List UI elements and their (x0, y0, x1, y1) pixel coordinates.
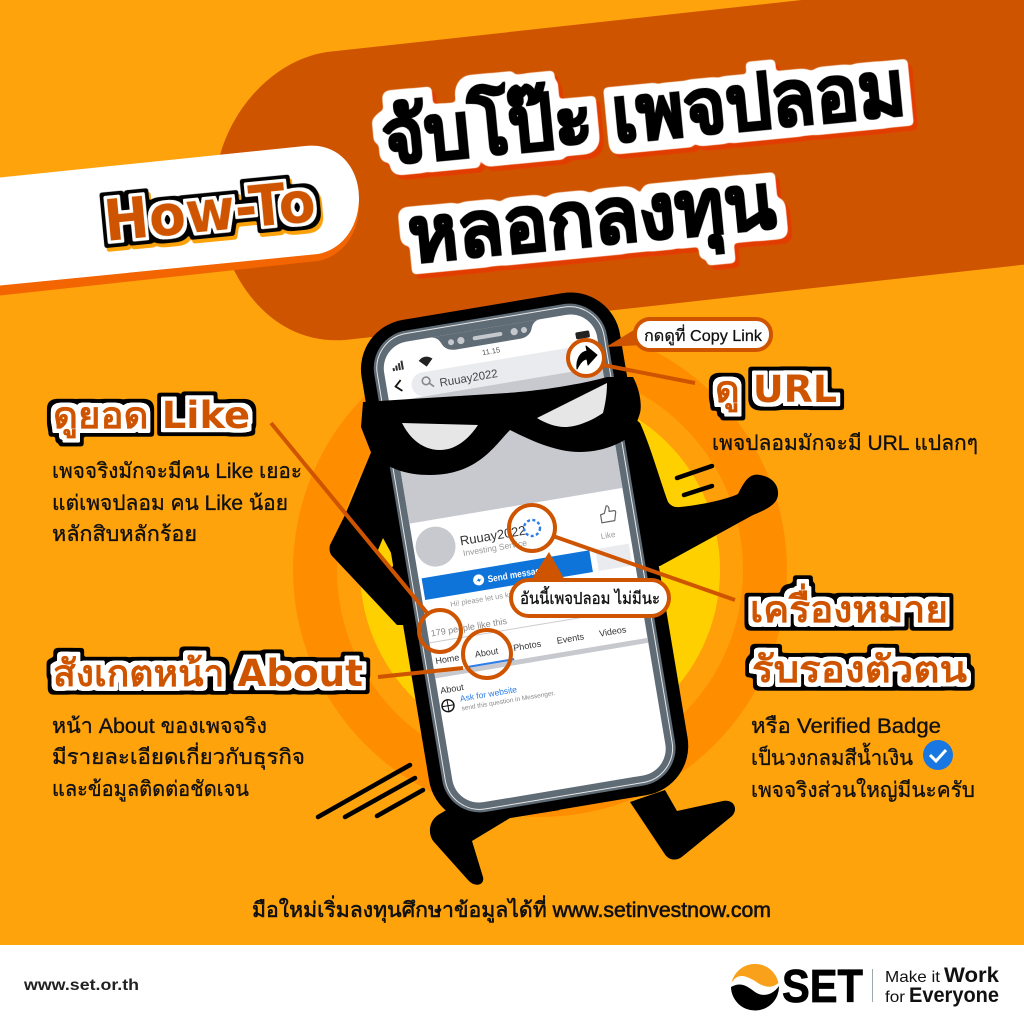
pointer lines (271, 365, 735, 677)
search field: Ruuay2022 (439, 368, 499, 390)
about section (439, 667, 556, 716)
callout: copy link: กดดูที่ Copy Link (644, 324, 763, 346)
SET logo: Work (944, 964, 999, 987)
section: view likes: หลักสิบหลักร้อย (52, 523, 197, 546)
tabs: Photos (513, 638, 542, 653)
section: about page (52, 652, 363, 802)
SET logo: for (885, 989, 906, 1006)
mask eyes (402, 383, 607, 450)
callout: no badge on fake page: อันนี้เพจปลอม ไม่มีนะ (520, 586, 660, 608)
footer note: มือใหม่เริ่มลงทุนศึกษาข้อมูลได้ที่ www.setinvestnow.com (252, 895, 771, 923)
title text: หลอกลงทุน (404, 159, 779, 284)
smartphone (353, 285, 696, 830)
section: view url (712, 368, 978, 455)
section: about page: หน้า About ของเพจจริง (52, 715, 267, 738)
page profile: Ruuay2022 (459, 523, 527, 548)
section: view likes (52, 394, 302, 546)
tabs: Videos (598, 624, 627, 639)
section: verified badge: เพจจริงส่วนใหญ่มีนะครับ (751, 778, 975, 802)
section: verified badge: รับรองตัวตน (752, 648, 967, 691)
section: verified badge: เครื่องหมาย (750, 583, 948, 631)
status bar (392, 329, 590, 372)
footer bar: www.set.or.th (23, 977, 139, 994)
title banner (215, 0, 1024, 340)
callout: no badge on fake page (511, 552, 669, 616)
send message button (422, 544, 635, 613)
about section: About (440, 682, 465, 696)
thief mask (361, 377, 641, 475)
about section: Ask for website (459, 684, 518, 704)
section: about page: และข้อมูลติดต่อชัดเจน (52, 778, 249, 802)
SET logo: SET (782, 960, 863, 1012)
page profile (413, 497, 620, 572)
send message button: Hi! please let us know (450, 588, 524, 609)
search field (394, 346, 583, 401)
tabs (432, 621, 648, 678)
section: view url: เพจปลอมมักจะมี URL แปลกๆ (712, 432, 978, 455)
section: verified badge (750, 583, 975, 802)
how-to label: How-To (101, 169, 318, 255)
highlight circle: likes (419, 610, 461, 652)
tabs: About (474, 646, 499, 659)
page profile: Investing Service (462, 537, 528, 558)
section: about page: มีรายละเอียดเกี่ยวกับธุรกิจ (52, 742, 305, 770)
send message button: Send message (487, 565, 546, 585)
thief arms and legs (330, 410, 778, 885)
icon: verified check (923, 740, 953, 770)
SET logo: Make it (885, 969, 941, 986)
highlight circle: about tab (463, 630, 511, 678)
title text: จับโป๊ะ เพจปลอม (378, 43, 909, 181)
notch (430, 319, 543, 353)
motion lines (318, 466, 712, 817)
status bar: 11.15 (481, 345, 501, 357)
highlight circle: verified badge (509, 505, 555, 551)
about section: send this question in Messenger. (461, 690, 556, 712)
SET logo (731, 960, 999, 1012)
highlight circle: share button (568, 340, 604, 376)
footer bar (0, 945, 1024, 1024)
likes count: 179 people like this (430, 616, 508, 638)
SET logo: Everyone (909, 984, 999, 1007)
section: verified badge: หรือ Verified Badge (751, 715, 941, 738)
section: view likes: เพจจริงมักจะมีคน Like เยอะ (52, 460, 302, 483)
background target circles (293, 323, 787, 817)
cover photo (389, 367, 622, 524)
tabs: Home (435, 652, 460, 666)
section: verified badge: เป็นวงกลมสีน้ำเงิน (751, 743, 913, 770)
section: view likes: แต่เพจปลอม คน Like น้อย (52, 492, 288, 515)
section: view url: ดู URL (715, 368, 837, 413)
page profile: Like (600, 530, 617, 541)
callout: copy link (606, 319, 771, 350)
how-to pill (0, 146, 359, 296)
tabs: Events (556, 631, 585, 646)
title text (378, 43, 909, 284)
section: view likes: ดูยอด Like (53, 394, 250, 439)
section: about page: สังเกตหน้า About (53, 652, 363, 695)
